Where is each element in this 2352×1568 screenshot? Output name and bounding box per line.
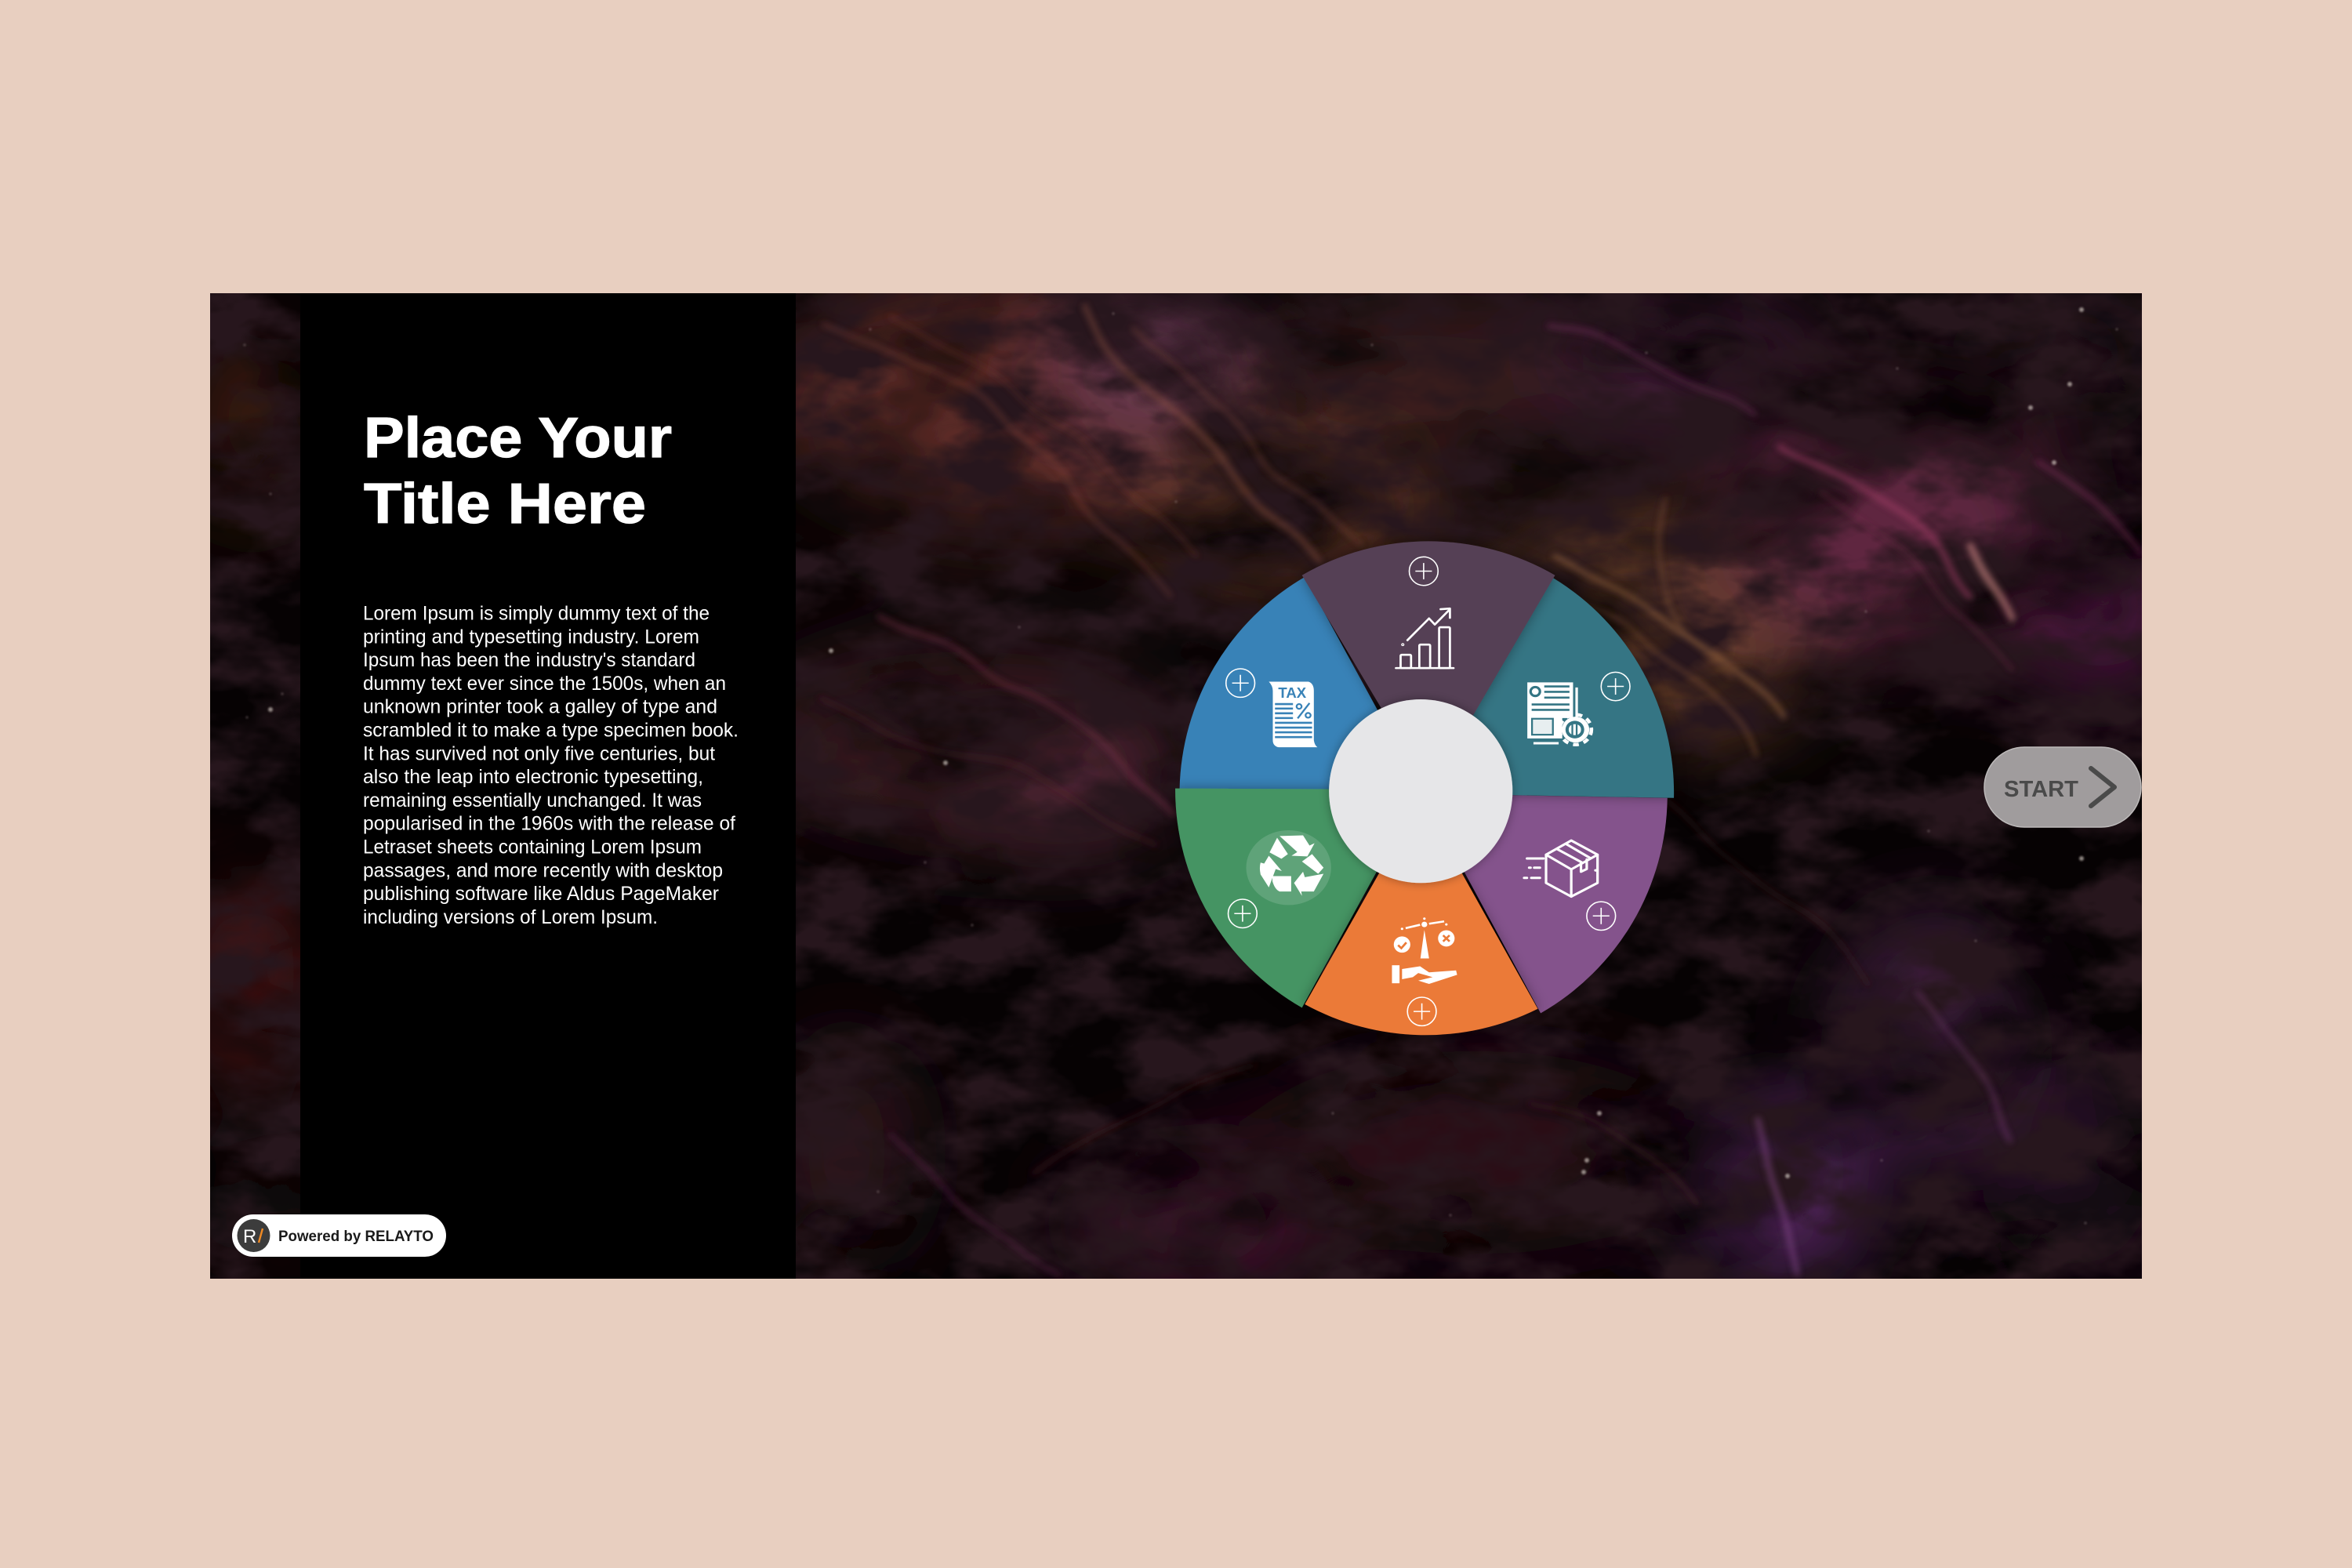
center circle (1329, 699, 1512, 883)
powered by badge: R (243, 1226, 256, 1247)
title: Title Here (364, 473, 646, 535)
infographic canvas (210, 293, 2142, 1279)
wheel diagram (1175, 541, 1674, 1035)
title: Place Your (364, 407, 672, 470)
icon: tax document: TAX (1278, 684, 1307, 701)
plus button: purple (1587, 902, 1616, 931)
body text block: remaining essentially unchanged. It was (363, 789, 702, 811)
slice: blue (1180, 577, 1422, 791)
body text block: scrambled it to make a type specimen book. (363, 720, 739, 742)
body text block: Letraset sheets containing Lorem Ipsum (363, 836, 702, 858)
body text block: unknown printer took a galley of type and (363, 696, 717, 718)
body text block: also the leap into electronic typesetting, (363, 766, 703, 788)
slice: purple (1422, 793, 1668, 1013)
plus button: green (1229, 899, 1257, 927)
icon: delivery box (1524, 840, 1598, 897)
icon: recycle (1246, 830, 1331, 905)
slice: teal (1422, 578, 1674, 798)
body text block (363, 602, 739, 928)
body text block: dummy text ever since the 1500s, when an (363, 673, 726, 695)
plus button: orange (1407, 997, 1436, 1025)
powered by badge: Powered by RELAYTO (278, 1229, 434, 1245)
body text block: including versions of Lorem Ipsum. (363, 906, 658, 928)
title (364, 407, 672, 535)
dark mottling (210, 293, 2142, 1279)
body text block: Lorem Ipsum is simply dummy text of the (363, 602, 710, 624)
slice: plum (1302, 541, 1555, 789)
body text block: It has survived not only five centuries, but (363, 742, 715, 764)
plus button: teal (1601, 672, 1630, 701)
body text block: passages, and more recently with desktop (363, 859, 723, 881)
icon: growth chart (1396, 608, 1454, 668)
body text block: popularised in the 1960s with the release of (363, 813, 735, 835)
body text block: printing and typesetting industry. Lorem (363, 626, 699, 648)
icon: document with gear (1527, 682, 1592, 745)
plus button: blue (1226, 669, 1255, 697)
slice: green (1175, 789, 1422, 1007)
plus button: plum (1410, 557, 1438, 586)
start button (1984, 747, 2141, 827)
body text block: publishing software like Aldus PageMaker (363, 883, 719, 905)
black text panel (300, 293, 796, 1279)
body text block: Ipsum has been the industry's standard (363, 649, 695, 671)
slice: orange (1305, 800, 1537, 1035)
star field (245, 310, 2117, 1223)
start button: START (2004, 777, 2078, 802)
icon: tax document (1269, 681, 1317, 747)
icon: scales and hand (1392, 917, 1457, 984)
nebula background image (204, 274, 2187, 1294)
powered by badge (232, 1214, 446, 1257)
